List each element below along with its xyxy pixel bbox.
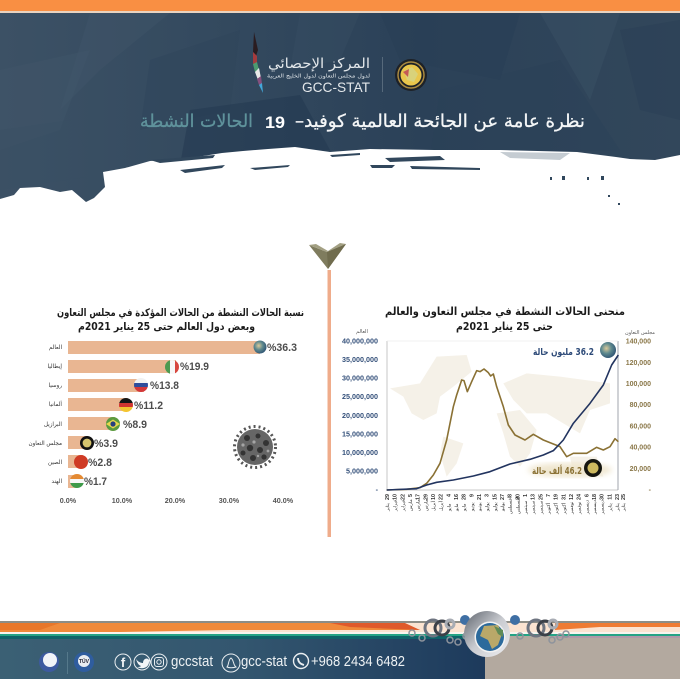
social icons bbox=[115, 654, 308, 672]
panel: active share bar chart bbox=[28, 307, 304, 505]
left axis labels: 10,000,000 bbox=[342, 448, 378, 457]
value labels: %3.9 bbox=[94, 438, 118, 450]
x axis date labels: ديسمبر bbox=[601, 500, 606, 515]
x axis date labels: يناير bbox=[616, 502, 621, 512]
right axis labels: 140,000 bbox=[626, 338, 651, 346]
x axis date labels: 24 bbox=[577, 494, 583, 500]
footer contact text: gccstat bbox=[171, 654, 213, 670]
x axis date labels: 29 bbox=[423, 494, 429, 500]
left axis labels: 5,000,000 bbox=[346, 466, 378, 476]
x axis date labels: يناير bbox=[622, 502, 627, 512]
right axis labels: 120,000 bbox=[626, 360, 651, 367]
accreditation logos: TÜV bbox=[79, 658, 90, 665]
x axis date labels: 10 bbox=[393, 494, 399, 500]
logo Arabic name: المركز الإحصائي bbox=[268, 56, 370, 72]
logo subtitle: لدول مجلس التعاون لدول الخليج العربية bbox=[267, 74, 370, 80]
x axis date labels: يوليو bbox=[493, 501, 498, 512]
row labels bbox=[28, 345, 62, 485]
right axis labels: 40,000 bbox=[630, 444, 651, 452]
x axis date labels: مايو bbox=[447, 503, 452, 512]
x axis labels: 40.0% bbox=[273, 496, 294, 505]
main heading: 19 bbox=[265, 113, 285, 132]
footer contact text: +968 2434 6482 bbox=[311, 654, 405, 670]
value labels: %11.2 bbox=[134, 400, 163, 412]
x axis date labels: 8 bbox=[508, 494, 514, 497]
x axis date labels: 1 bbox=[523, 494, 529, 497]
x axis date labels: 7 bbox=[546, 494, 552, 497]
x axis date labels: يوليو bbox=[501, 501, 506, 512]
main heading: نظرة عامة عن الجائحة العالمية كوفيد– bbox=[295, 111, 585, 132]
value labels: %36.3 bbox=[267, 342, 297, 354]
row labels: مجلس التعاون bbox=[28, 441, 62, 447]
row labels: البرازيل bbox=[44, 422, 62, 428]
curve: GCC active cases bbox=[387, 369, 618, 490]
world map backdrop bbox=[390, 355, 610, 477]
curve: world active cases bbox=[387, 355, 618, 490]
x axis date labels: 11 bbox=[607, 494, 613, 500]
x axis date labels: 5 bbox=[408, 494, 414, 497]
value labels bbox=[84, 342, 297, 488]
x axis date labels: أبريل bbox=[438, 500, 445, 511]
callout: world total: 36.2 مليون حالة bbox=[533, 347, 594, 358]
logo GCC-STAT wordmark: GCC-STAT bbox=[302, 79, 370, 95]
x axis date labels: 21 bbox=[477, 494, 483, 500]
logo: GCC-STAT bbox=[253, 32, 427, 95]
x axis date labels: أكتوبر bbox=[560, 502, 567, 515]
x axis labels: 10.0% bbox=[112, 496, 133, 505]
x axis date labels: مايو bbox=[455, 503, 460, 512]
value labels: %2.8 bbox=[88, 457, 112, 469]
x axis date labels: 6 bbox=[584, 494, 590, 497]
icon glyph: facebook: f bbox=[121, 655, 126, 670]
footer contact text bbox=[171, 654, 405, 670]
row labels: العالم bbox=[49, 345, 62, 351]
right axis labels bbox=[626, 338, 652, 494]
flags bbox=[70, 340, 266, 488]
x axis date labels: ديسمبر bbox=[593, 500, 598, 515]
row labels: إيطاليا bbox=[47, 364, 62, 370]
logo pennant bbox=[253, 32, 263, 93]
axis captions: العالم bbox=[356, 329, 368, 335]
x axis date labels: 17 bbox=[416, 494, 422, 500]
right axis labels: 100,000 bbox=[626, 381, 651, 388]
x axis date labels: نوفمبر bbox=[578, 502, 583, 515]
right chart title bbox=[385, 305, 625, 333]
orange top strip bbox=[0, 0, 680, 11]
x axis date labels: 25 bbox=[538, 494, 544, 500]
x axis date labels: 22 bbox=[439, 494, 445, 500]
x axis date labels: 3 bbox=[485, 494, 491, 497]
left axis labels bbox=[342, 336, 379, 494]
x axis labels: 30.0% bbox=[219, 496, 240, 505]
icon: coronavirus bbox=[234, 426, 276, 468]
x axis date labels: يناير bbox=[608, 502, 613, 512]
row labels: ألمانيا bbox=[49, 400, 62, 408]
x axis labels: 20.0% bbox=[165, 496, 186, 505]
x axis date labels: مارس bbox=[409, 499, 414, 511]
x axis date labels: يناير bbox=[386, 502, 391, 512]
x axis labels bbox=[60, 496, 294, 505]
left axis labels: 25,000,000 bbox=[342, 392, 378, 401]
x axis date labels: 10 bbox=[431, 494, 437, 500]
chevron ornament bbox=[309, 243, 346, 269]
left chart title bbox=[57, 307, 304, 333]
x axis date labels: أكتوبر bbox=[545, 502, 552, 515]
x axis date labels: 9 bbox=[469, 494, 475, 497]
x axis date labels: سبتمبر bbox=[539, 501, 544, 515]
x axis date labels: 12 bbox=[569, 494, 575, 500]
bars bbox=[68, 341, 260, 488]
x axis date labels: 23 bbox=[615, 494, 621, 500]
right chart title: حتى 25 يناير 2021م bbox=[456, 320, 553, 333]
x axis date labels: أكتوبر bbox=[553, 502, 560, 515]
x axis date labels: مارس bbox=[417, 499, 422, 511]
x axis date labels: فبراير bbox=[394, 500, 399, 512]
right axis labels: 80,000 bbox=[630, 402, 651, 409]
x axis date labels: 16 bbox=[454, 494, 460, 500]
x axis labels: 0.0% bbox=[60, 496, 77, 505]
x axis date labels: 13 bbox=[531, 494, 537, 500]
x axis date labels: 19 bbox=[554, 494, 560, 500]
vertical divider bbox=[328, 270, 331, 537]
x axis date labels: فبراير bbox=[401, 500, 406, 512]
x axis date labels: مايو bbox=[463, 503, 468, 512]
main heading: الحالات النشطة bbox=[140, 111, 253, 132]
x axis date labels bbox=[385, 494, 627, 515]
x axis date labels: 25 bbox=[621, 494, 627, 500]
row labels: الصين bbox=[48, 460, 62, 466]
right chart title: منحنى الحالات النشطة في مجلس التعاون والعالم bbox=[385, 305, 625, 318]
header banner bbox=[0, 0, 680, 208]
accreditation logos bbox=[39, 652, 94, 674]
right axis labels: 60,000 bbox=[630, 424, 651, 430]
footer contact text: gcc-stat bbox=[241, 654, 287, 670]
x axis date labels: 18 bbox=[592, 494, 598, 500]
globe ornament bbox=[409, 611, 569, 657]
footer beige panel bbox=[485, 636, 680, 679]
x axis date labels: 15 bbox=[492, 494, 498, 500]
x axis date labels: أبريل bbox=[430, 500, 437, 511]
x axis date labels: يونيو bbox=[470, 502, 475, 512]
x axis date labels: يوليو bbox=[486, 501, 491, 512]
footer bbox=[0, 611, 680, 679]
value labels: %13.8 bbox=[150, 380, 179, 392]
left axis labels: 20,000,000 bbox=[342, 411, 378, 420]
row labels: الهند bbox=[52, 479, 62, 485]
panel: active cases line chart bbox=[342, 305, 655, 515]
x axis date labels: أغسطس bbox=[507, 496, 514, 514]
x axis date labels: 27 bbox=[500, 494, 506, 500]
left chart title: وبعض دول العالم حتى 25 يناير 2021م bbox=[78, 321, 255, 333]
right axis labels: - bbox=[649, 487, 652, 494]
x axis date labels: نوفمبر bbox=[570, 502, 575, 515]
value labels: %19.9 bbox=[180, 361, 209, 373]
left axis labels: 15,000,000 bbox=[342, 430, 378, 438]
axis captions: مجلس التعاون bbox=[625, 330, 655, 336]
left axis labels: - bbox=[376, 485, 379, 494]
value labels: %8.9 bbox=[123, 419, 147, 431]
brush streaks bbox=[150, 152, 620, 205]
x axis date labels: 22 bbox=[400, 494, 406, 500]
x axis date labels: 31 bbox=[561, 494, 567, 500]
x axis date labels: أغسطس bbox=[514, 496, 521, 514]
footer colour bands bbox=[0, 621, 680, 639]
GCC seal bbox=[395, 59, 427, 91]
row labels: روسيا bbox=[49, 383, 62, 389]
header texture background bbox=[0, 11, 680, 208]
left axis labels: 35,000,000 bbox=[342, 355, 378, 364]
x axis date labels: 29 bbox=[385, 494, 391, 500]
x axis date labels: 28 bbox=[462, 494, 468, 500]
left axis labels: 40,000,000 bbox=[342, 336, 378, 346]
x axis date labels: 4 bbox=[446, 494, 452, 497]
axes bbox=[387, 341, 618, 490]
footer navy panel bbox=[0, 639, 485, 679]
value labels: %1.7 bbox=[84, 476, 107, 488]
x axis date labels: ديسمبر bbox=[585, 500, 590, 515]
axis captions bbox=[356, 329, 655, 336]
x axis date labels: سبتمبر bbox=[524, 501, 529, 515]
icon glyph: twitter bird bbox=[136, 659, 150, 668]
x axis date labels: يونيو bbox=[478, 502, 483, 512]
x axis date labels: مارس bbox=[424, 499, 429, 511]
torn white brush edge bbox=[0, 147, 680, 208]
left chart title: نسبة الحالات النشطة من الحالات المؤكدة في مجلس التعاون bbox=[57, 307, 304, 319]
callout: GCC total bbox=[528, 459, 612, 477]
x axis date labels: 20 bbox=[515, 494, 521, 500]
x axis date labels: 30 bbox=[600, 494, 606, 500]
main heading bbox=[140, 111, 585, 132]
callout: GCC total: 46.2 ألف حالة bbox=[532, 464, 582, 477]
callout: world total bbox=[533, 342, 616, 358]
right axis labels: 20,000 bbox=[630, 466, 651, 473]
x axis date labels: سبتمبر bbox=[532, 501, 537, 515]
left axis labels: 30,000,000 bbox=[342, 374, 378, 382]
